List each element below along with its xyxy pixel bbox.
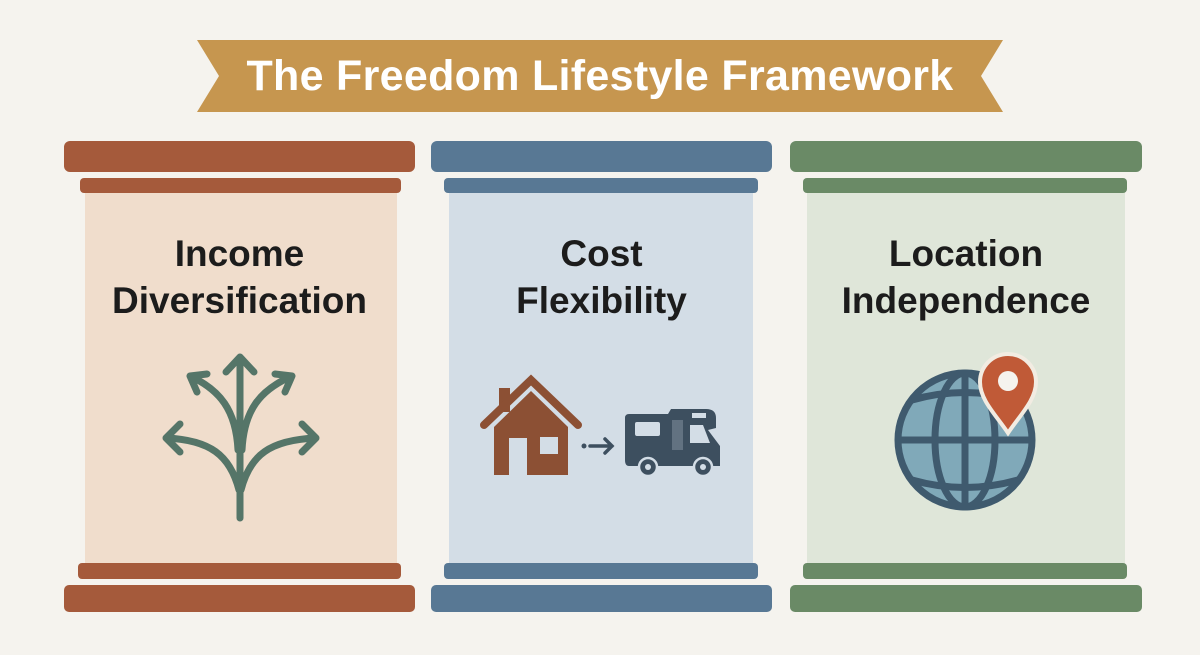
heading: Income [175,233,304,274]
title banner [197,40,1003,112]
title banner: The Freedom Lifestyle Framework [246,52,954,100]
heading [842,233,1090,321]
heading: Independence [842,280,1090,321]
panel: income diversification [64,141,415,612]
panel: cost flexibility [431,141,772,612]
heading [112,233,367,321]
heading: Flexibility [516,280,687,321]
heading: Diversification [112,280,367,321]
icon: branching arrows [162,354,320,522]
panel: location independence [790,141,1142,612]
icon: globe with pin [894,352,1038,510]
icon: house to rv [480,374,720,475]
heading: Cost [560,233,643,274]
heading [516,233,687,321]
heading: Location [889,233,1043,274]
